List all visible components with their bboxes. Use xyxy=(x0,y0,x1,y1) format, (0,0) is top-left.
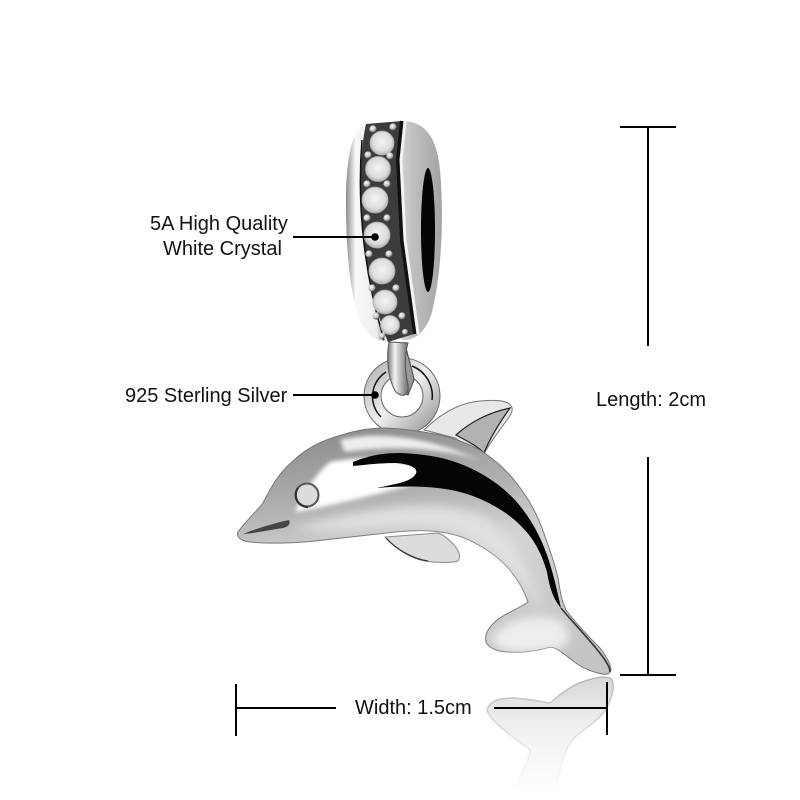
callout: silver label xyxy=(125,385,379,407)
crystal label text: 5A High Quality xyxy=(150,213,288,235)
tail reflection xyxy=(487,677,613,792)
body highlights xyxy=(290,436,569,653)
length brackets xyxy=(620,127,676,675)
mouth xyxy=(243,520,290,534)
length label: Length: 2cm xyxy=(596,389,706,411)
callout: crystal label xyxy=(150,213,379,260)
pave crystal band xyxy=(361,121,414,342)
dimension: width xyxy=(236,682,607,736)
jewelry: crystal spacer bead xyxy=(346,121,442,342)
dorsal fin xyxy=(424,400,512,456)
eye xyxy=(296,484,318,507)
width label: Width: 1.5cm xyxy=(355,697,472,719)
crystal prongs xyxy=(363,123,408,339)
connector loop xyxy=(402,342,414,395)
crystal leader line xyxy=(293,236,375,238)
bead through hole xyxy=(421,168,435,292)
silver leader line xyxy=(293,394,375,396)
jewelry: connector loop and jump ring xyxy=(372,342,432,426)
black stripe on back xyxy=(353,453,561,608)
dolphin body xyxy=(238,428,611,674)
crystals xyxy=(362,131,400,334)
jewelry: dolphin xyxy=(238,400,611,674)
dimension: length xyxy=(596,127,706,675)
callout: crystal label: White Crystal xyxy=(163,238,282,260)
width brackets xyxy=(236,682,607,736)
silver label text: 925 Sterling Silver xyxy=(125,385,288,407)
jump ring xyxy=(372,366,432,426)
back edge to tail line xyxy=(561,608,610,672)
bead right face xyxy=(385,121,442,340)
pectoral fin xyxy=(385,533,460,562)
bead left rim xyxy=(346,124,384,341)
